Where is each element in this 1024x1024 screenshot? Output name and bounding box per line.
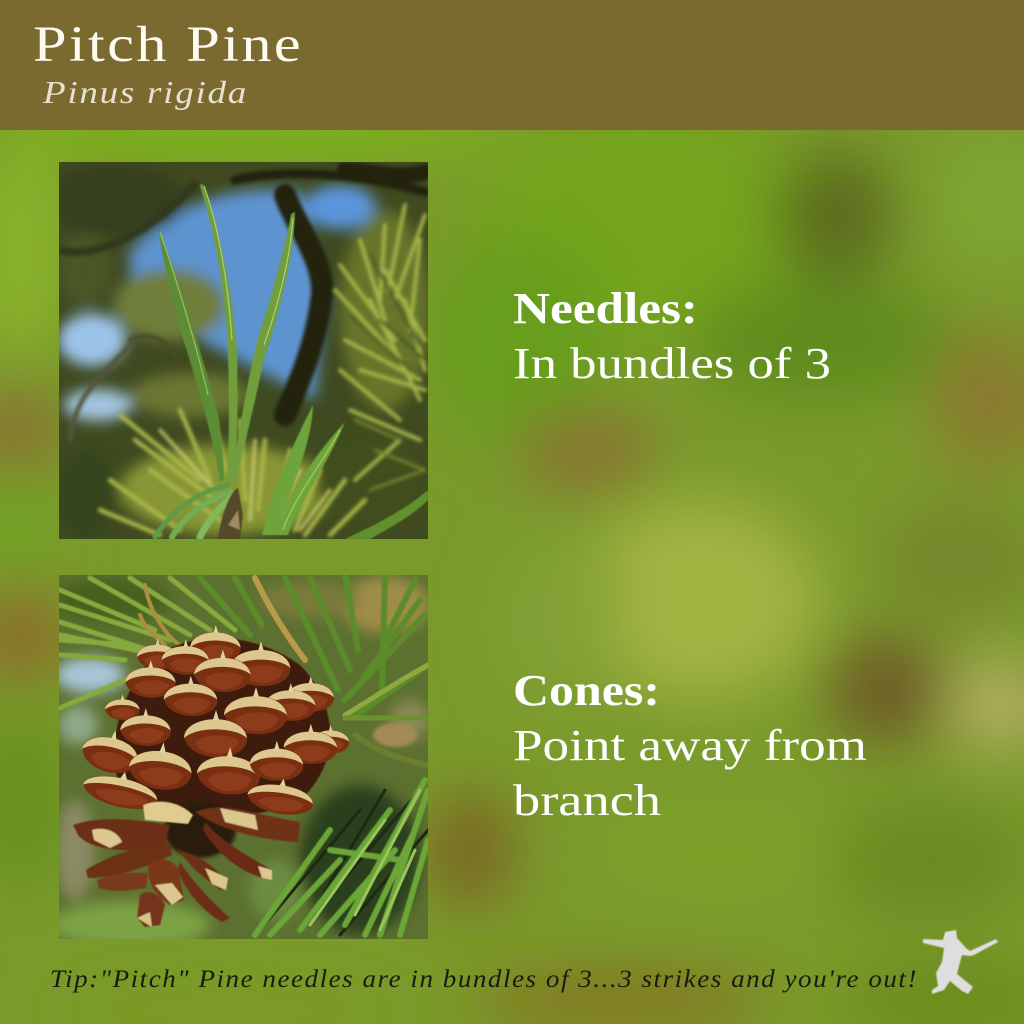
photo: pitch pine cone xyxy=(50,575,430,949)
tip text: Tip:"Pitch" Pine needles are in bundles of 3...3 strikes and you're out! xyxy=(50,966,918,993)
text block: cones xyxy=(513,666,867,825)
text block: needles: Needles: xyxy=(513,284,698,333)
cone scales xyxy=(79,625,349,818)
text block: needles: In bundles of 3 xyxy=(513,339,831,388)
text block: needles xyxy=(513,284,831,388)
title: Pitch Pine xyxy=(33,17,303,73)
text block: cones: branch xyxy=(513,776,661,825)
text block: cones: Point away from xyxy=(513,721,867,770)
icon: baseball batter xyxy=(923,930,998,994)
header band xyxy=(0,0,1024,130)
subtitle: scientific name: Pinus rigida xyxy=(42,74,248,110)
text block: cones: Cones: xyxy=(513,666,660,715)
photo: pitch pine needles xyxy=(45,162,430,540)
